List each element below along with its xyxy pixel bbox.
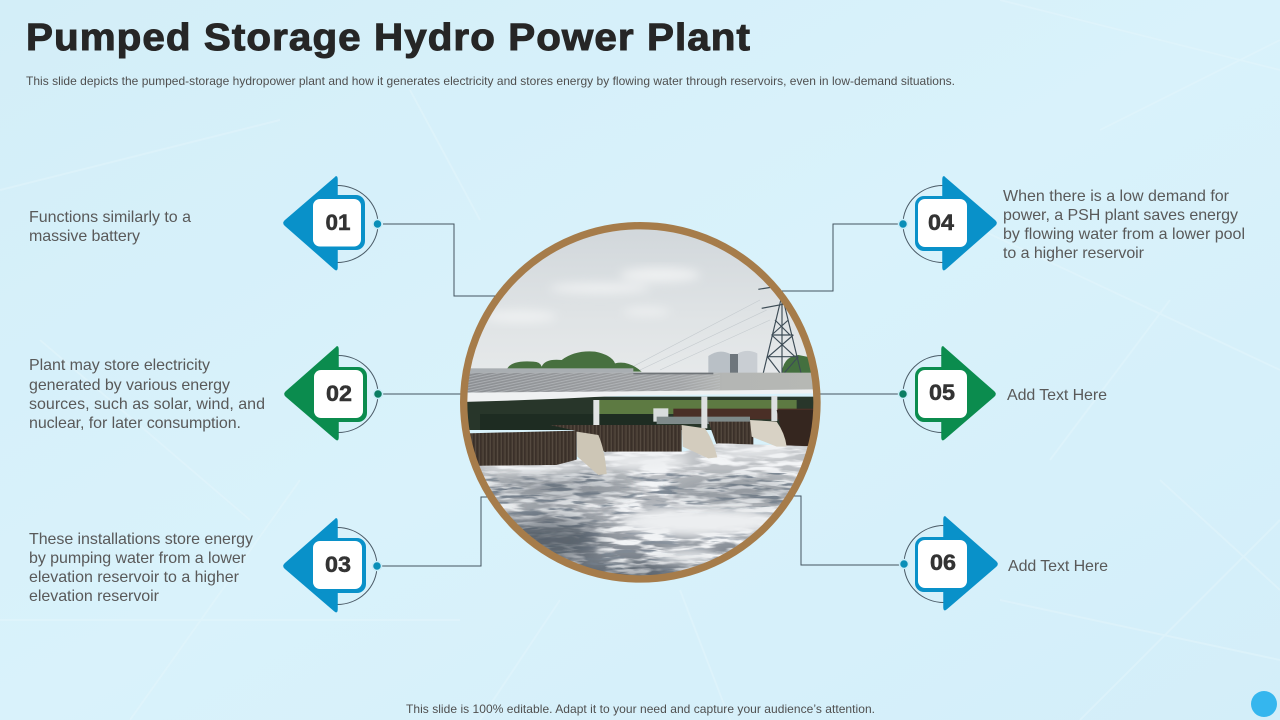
piers posts (593, 400, 600, 425)
text block 01 (29, 209, 191, 245)
weir walls (550, 425, 682, 453)
subtitle: This slide depicts the pumped-storage hydropower plant and how it generates electricity and stores energy by flowing water through reservoirs, even in low-demand situations. (26, 74, 955, 88)
number 06: 06 (930, 550, 956, 575)
icon 03 (284, 519, 382, 612)
text block 02 (29, 357, 265, 432)
text block 03: by pumping water from a lower (29, 550, 247, 567)
text block 04: by flowing water from a lower pool (1003, 226, 1245, 243)
text block 01: massive battery (29, 228, 140, 245)
sky (471, 230, 807, 372)
title: Pumped Storage Hydro Power Plant (26, 17, 751, 59)
concrete piers (577, 432, 607, 475)
number 01: 01 (326, 210, 350, 235)
text block 04: to a higher reservoir (1003, 245, 1145, 262)
text block 01: Functions similarly to a (29, 209, 191, 226)
water (479, 443, 808, 576)
tree line (507, 351, 642, 372)
text block 02: Plant may store electricity (29, 357, 210, 374)
corner dot (1251, 691, 1277, 717)
number 03: 03 (325, 552, 351, 577)
connector lines (382, 224, 908, 566)
photo ring (464, 226, 817, 579)
icon 01 (284, 177, 382, 270)
number 02: 02 (326, 381, 352, 406)
text block 03: elevation reservoir (29, 588, 160, 605)
icon 05 (898, 347, 995, 440)
central photo: dam and weir (460, 220, 825, 589)
text block 03 (29, 531, 253, 605)
silos (708, 352, 730, 375)
text block 06: Add Text Here (1008, 558, 1108, 575)
number 05: 05 (929, 380, 955, 405)
pylon (758, 286, 802, 376)
footer note: This slide is 100% editable. Adapt it to your need and capture your audience’s attention. (406, 702, 875, 716)
icon 02 (285, 347, 382, 440)
text block 05: Add Text Here (1007, 387, 1107, 404)
icon 06 (900, 517, 997, 610)
text block 04 (1003, 188, 1245, 262)
text block 02: sources, such as solar, wind, and (29, 396, 265, 413)
text block 04: When there is a low demand for (1003, 188, 1230, 205)
text block 04: power, a PSH plant saves energy (1003, 207, 1238, 224)
far bank (460, 397, 825, 430)
bridge deck (460, 389, 825, 402)
text block 03: elevation reservoir to a higher (29, 569, 240, 586)
text block 02: generated by various energy (29, 377, 230, 394)
icon 04 (898, 177, 996, 270)
number 04: 04 (928, 210, 955, 235)
text block 03: These installations store energy (29, 531, 253, 548)
bridge side mesh (460, 373, 825, 393)
text block 02: nuclear, for later consumption. (29, 415, 241, 432)
